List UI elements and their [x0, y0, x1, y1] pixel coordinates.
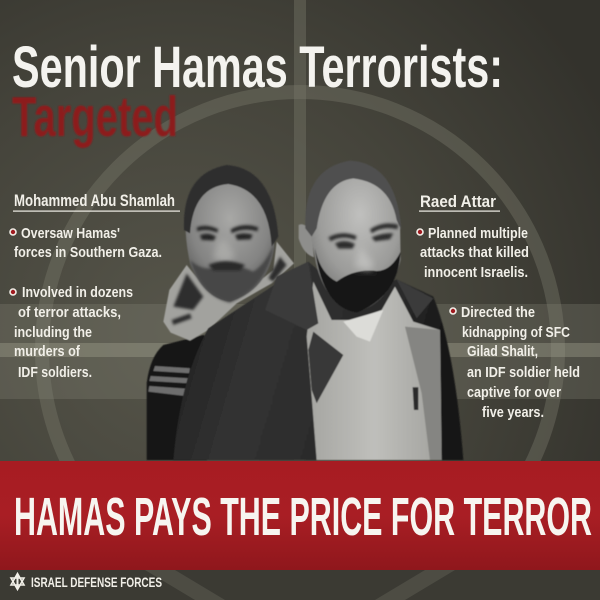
bullet text 2	[461, 304, 580, 421]
beard	[190, 242, 275, 303]
brows and eyes	[197, 225, 258, 241]
bullet text 2: including the	[14, 324, 92, 341]
brows and eyes	[328, 223, 398, 249]
bullet text 1: Planned multiple	[428, 225, 528, 242]
photo: Mohammed Abu Shamlah	[147, 165, 294, 460]
bullet text 2: murders of	[14, 343, 81, 360]
scarf pattern	[172, 257, 287, 325]
panel: Mohammed Abu Shamlah	[10, 191, 180, 381]
title line 2: Targeted	[12, 85, 178, 149]
bullet text 2: captive for over	[467, 384, 561, 401]
name: Mohammed Abu Shamlah	[14, 191, 175, 210]
bullet text 1: attacks that killed	[420, 244, 529, 261]
banner	[0, 461, 600, 570]
scarf	[163, 242, 294, 341]
head	[186, 183, 274, 302]
shirt	[307, 282, 442, 460]
nose	[213, 240, 235, 263]
moustache	[208, 261, 245, 271]
icon: IDF star and sword	[11, 574, 24, 590]
jacket lapel	[308, 332, 343, 403]
bullet text 2: Directed the	[461, 304, 535, 321]
body	[147, 335, 227, 460]
hair	[305, 161, 401, 237]
bullet text 1: innocent Israelis.	[424, 264, 528, 281]
bullet 1	[10, 229, 16, 235]
bullet text 2: five years.	[482, 404, 544, 421]
bullet text 2: Involved in dozens	[22, 284, 133, 301]
right collar	[397, 279, 433, 318]
bullet text 2: Gilad Shalit,	[467, 343, 538, 360]
nose	[355, 245, 373, 271]
bullet text 1: forces in Southern Gaza.	[14, 244, 162, 261]
bullet text 1: Oversaw Hamas'	[21, 225, 120, 242]
bullet text 2	[14, 284, 133, 381]
bullet text 2: IDF soldiers.	[18, 364, 92, 381]
name underline	[419, 210, 500, 212]
name underline	[13, 210, 180, 212]
bullet 1	[417, 229, 423, 235]
footer	[0, 570, 600, 600]
title	[12, 35, 503, 149]
ear	[299, 224, 314, 257]
organisation name: ISRAEL DEFENSE FORCES	[31, 574, 162, 590]
undershirt	[343, 310, 383, 342]
footer background	[0, 570, 600, 600]
pen	[413, 387, 418, 410]
bullet text 1	[420, 225, 529, 281]
sleeve stripes	[148, 366, 190, 396]
bullet text 1	[14, 225, 162, 261]
panel: Raed Attar	[417, 192, 580, 421]
banner background	[0, 461, 600, 570]
name: Raed Attar	[420, 192, 496, 211]
bullet text 2: an IDF soldier held	[467, 364, 580, 381]
bullet 2	[10, 289, 16, 295]
hair	[184, 165, 278, 247]
beard	[315, 248, 401, 313]
bullet text 2: of terror attacks,	[18, 304, 121, 321]
right placket	[405, 327, 442, 460]
bullet 2	[450, 308, 456, 314]
face	[310, 177, 401, 312]
photo: Raed Attar	[173, 161, 463, 460]
bullet text 2: kidnapping of SFC	[462, 324, 570, 341]
jacket	[173, 262, 463, 460]
jacket collar	[265, 262, 318, 330]
